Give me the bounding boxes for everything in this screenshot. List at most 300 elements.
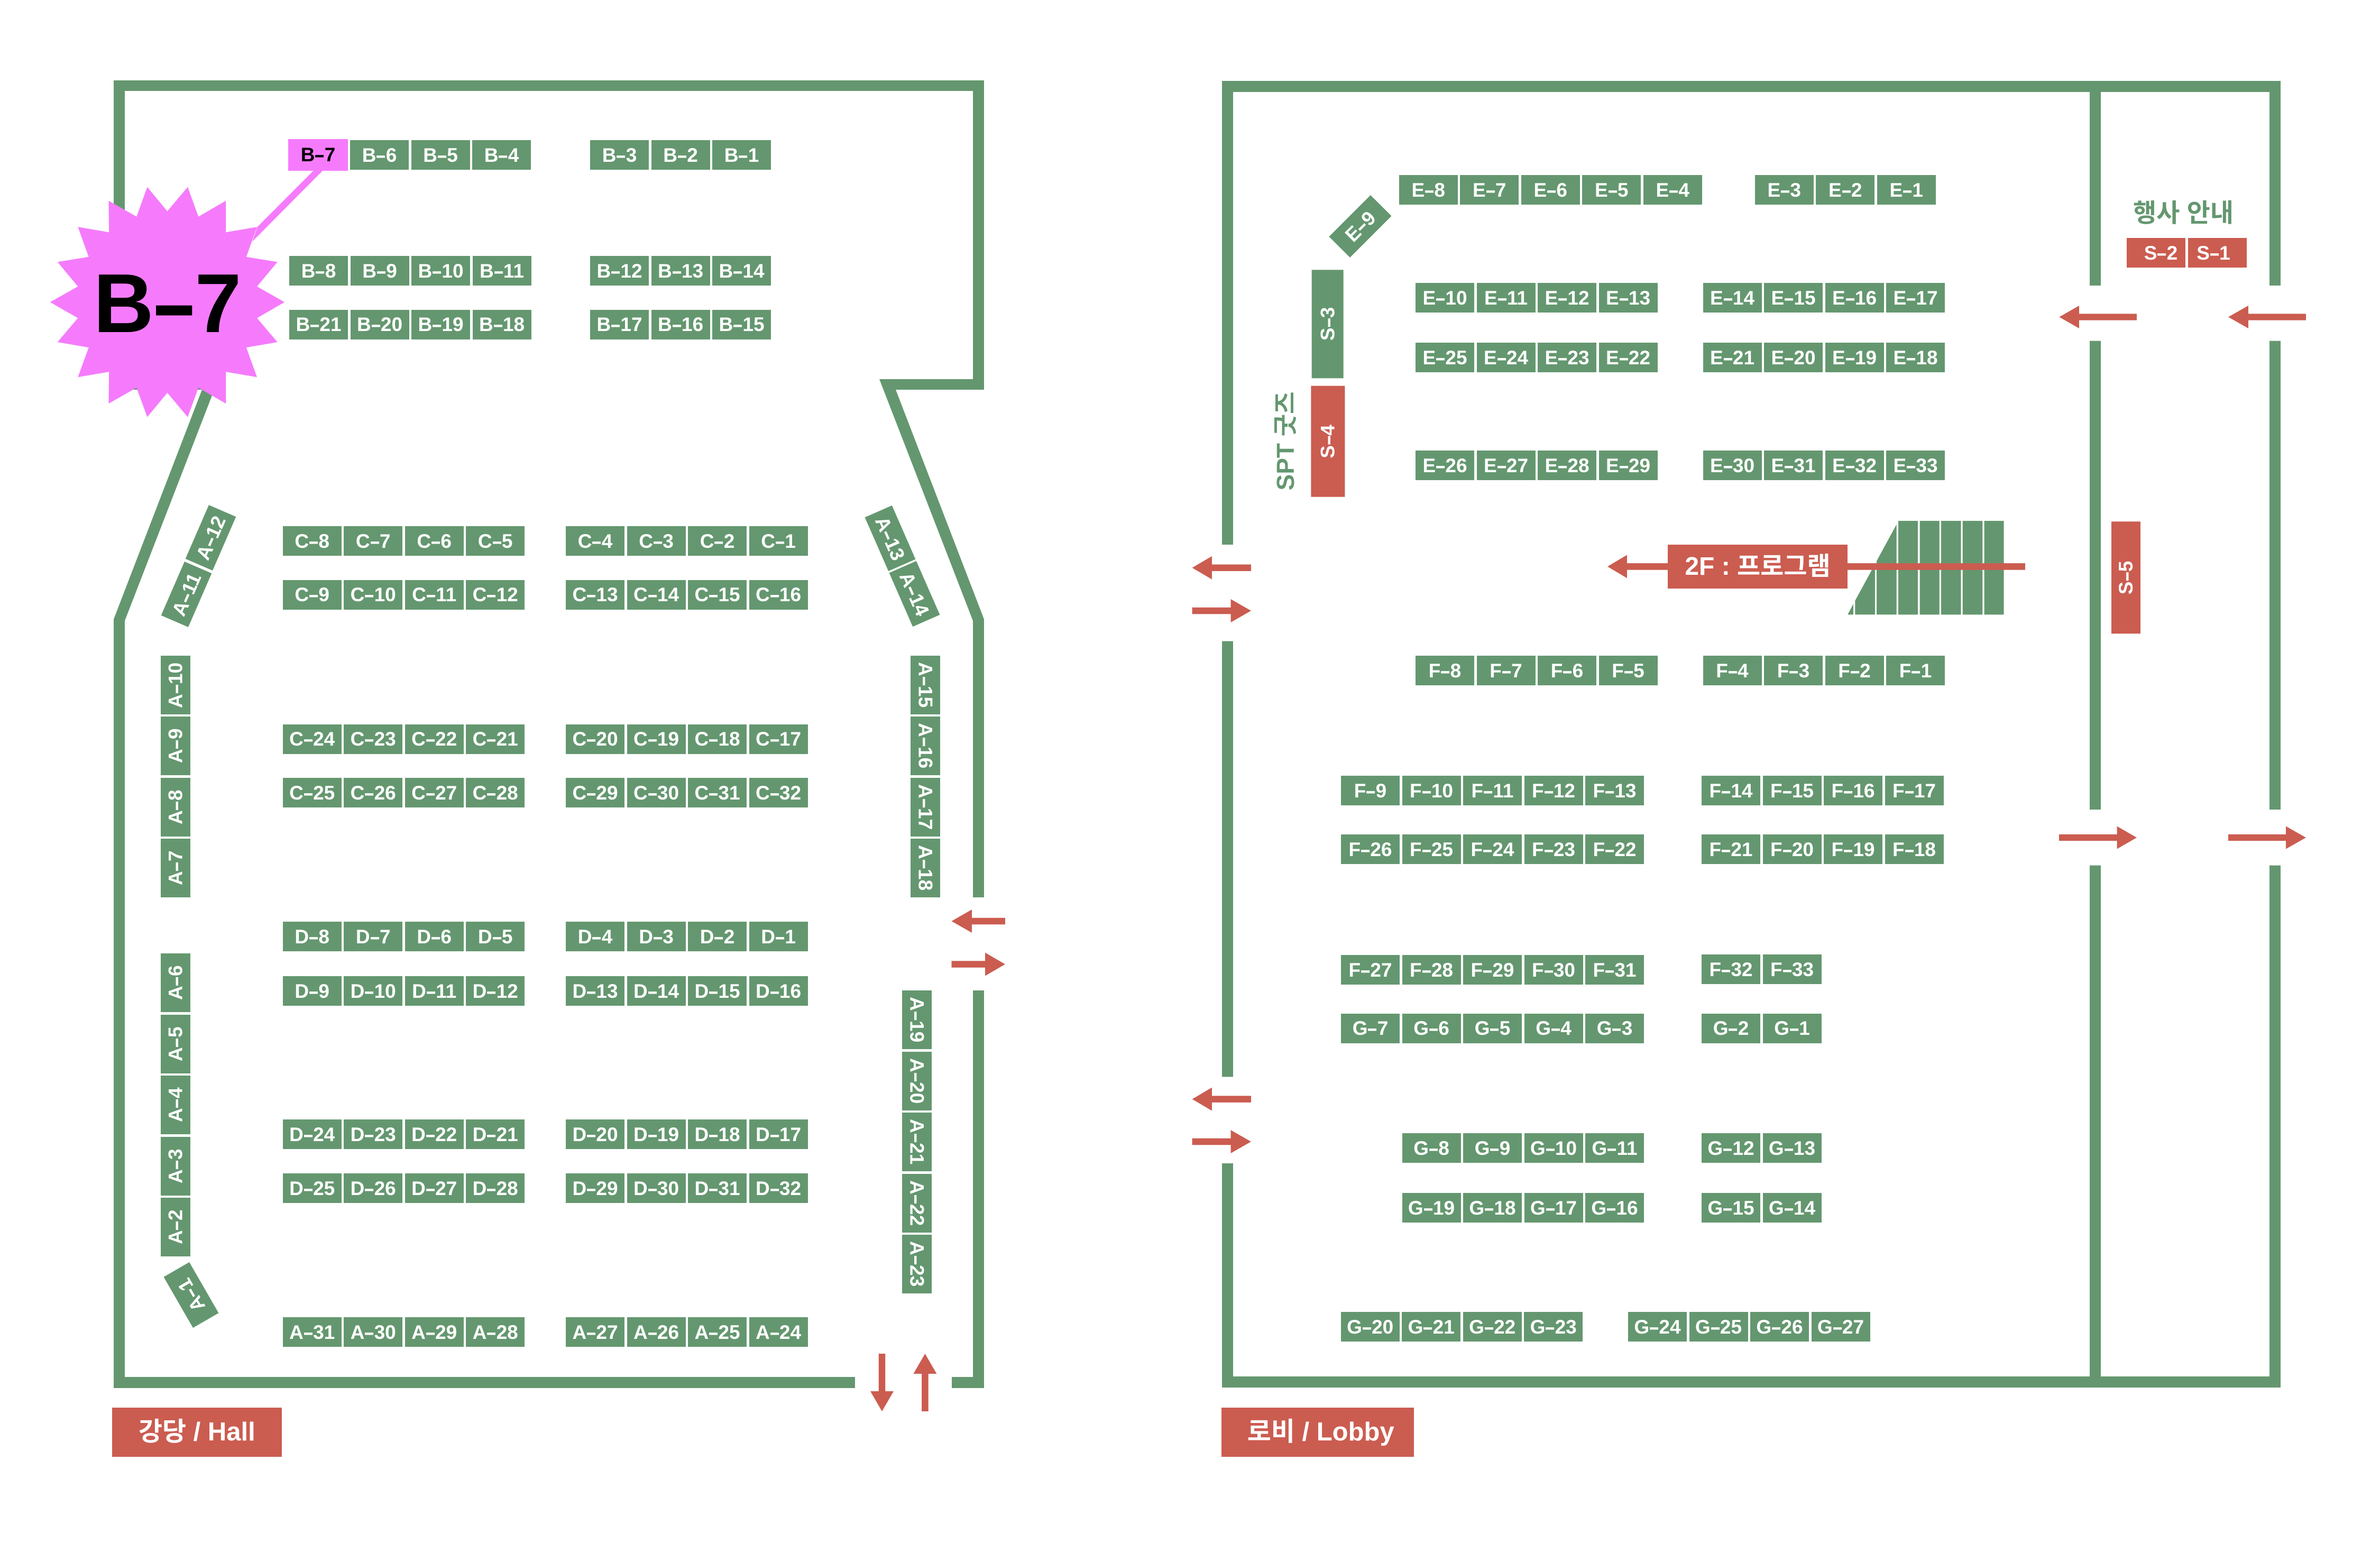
seats: G-19 to G-16 bbox=[1402, 1193, 1644, 1223]
seats: A-27 to A-24: - bbox=[586, 1321, 597, 1343]
seats: A-11 and A-12 angled: - bbox=[197, 532, 221, 550]
wall: hall outline bbox=[114, 80, 984, 1388]
arrow: corridor upper right bbox=[2228, 306, 2306, 328]
seats: E-10 to E-13: E 12 bbox=[1545, 287, 1589, 309]
seats: C-29 to C-32: - bbox=[769, 782, 780, 804]
seats: C-29 to C-32: C 29 bbox=[572, 782, 618, 804]
seats: B-8 to B-11: - bbox=[376, 260, 387, 281]
seats: F-14 to F-17 bbox=[1702, 776, 1944, 805]
seats: A-27 to A-24: A 26 bbox=[633, 1321, 679, 1343]
seats: C-4 to C-1 bbox=[566, 526, 808, 556]
seats: F-27 to F-31: F 30 bbox=[1532, 959, 1575, 980]
seats: C-29 to C-32 bbox=[566, 778, 808, 807]
seats: F-14 to F-17: F 15 bbox=[1770, 779, 1814, 802]
seats: F-27 to F-31: F 29 bbox=[1471, 959, 1514, 980]
seats: D-25 to D-28: - bbox=[486, 1177, 497, 1199]
seats: E-21 to E-18: E 21 bbox=[1710, 347, 1754, 368]
seats: B-3 to B-1: B 2 bbox=[663, 144, 698, 166]
seats: F-21 to F-18: F 20 bbox=[1770, 839, 1814, 860]
seats: D-29 to D-32: - bbox=[708, 1177, 719, 1199]
arrow: lobby west door in 1 bbox=[1192, 599, 1251, 622]
seats: A-11 and A-12 angled: A11 bbox=[167, 570, 205, 619]
seats: C-9 to C-12: - bbox=[426, 584, 436, 605]
seats: C-24 to C-21: C 22 bbox=[411, 728, 457, 750]
seats: E-10 to E-13 bbox=[1416, 283, 1657, 313]
seats: C-20 to C-17: - bbox=[647, 728, 658, 750]
seats: B-8 to B-11: B 9 bbox=[362, 260, 397, 281]
seats: A-19 to A-23 vertical: - bbox=[906, 1255, 927, 1266]
seats: C-8 to C-5: - bbox=[430, 530, 442, 552]
seats: C-25 to C-28: C 25 bbox=[289, 782, 335, 804]
seats: E-26 to E-29: E 29 bbox=[1606, 455, 1650, 476]
seats: D-4 to D-1: - bbox=[713, 925, 724, 948]
arrow: hall south door down bbox=[870, 1354, 894, 1411]
seats: E-8 to E-4: - bbox=[1546, 179, 1557, 201]
seats: B-17 to B-15: - bbox=[732, 314, 743, 335]
seats: C-9 to C-12: - bbox=[364, 584, 375, 605]
seats: F-27 to F-31: - bbox=[1482, 959, 1493, 980]
seats: C-9 to C-12: - bbox=[486, 584, 497, 605]
seats: F-4 to F-1: F 2 bbox=[1838, 660, 1871, 681]
seats: D-29 to D-32: D 30 bbox=[633, 1177, 679, 1199]
seats: G-15 and G-14: G 14 bbox=[1769, 1197, 1815, 1218]
seats: E-25 to E-22 bbox=[1416, 343, 1657, 372]
seats: D-8 to D-5: D 5 bbox=[478, 925, 512, 948]
seats: E-21 to E-18: E 19 bbox=[1832, 347, 1877, 368]
seats: F-4 to F-1: - bbox=[1910, 660, 1922, 681]
seats: F-8 to F-5: - bbox=[1501, 660, 1512, 681]
seats: F-26 to F-22: F 25 bbox=[1410, 839, 1453, 860]
seat: S-5: - bbox=[2115, 571, 2137, 582]
seats: G-2 and G-1: - bbox=[1789, 1017, 1800, 1039]
seats: F-8 to F-5: F 6 bbox=[1551, 660, 1583, 681]
seats: E-30 to E-33: - bbox=[1784, 455, 1795, 476]
seats: E-26 to E-29: E 27 bbox=[1484, 455, 1528, 476]
seats: G-7 to G-3: G 4 bbox=[1536, 1017, 1572, 1039]
arrow: hall east door out bbox=[952, 910, 1005, 933]
seats: D-29 to D-32: - bbox=[586, 1177, 597, 1199]
seats: C-20 to C-17: C 20 bbox=[572, 728, 618, 750]
seats: A-6 to A-2 vertical: - bbox=[164, 1220, 186, 1231]
seats: D-13 to D-16: - bbox=[586, 980, 597, 1002]
arrow: corridor upper left bbox=[2059, 306, 2137, 328]
seats: G-20 to G-23: - bbox=[1362, 1316, 1372, 1338]
seats: C-24 to C-21: C 21 bbox=[473, 728, 518, 750]
seats: E-10 to E-13: - bbox=[1618, 287, 1629, 309]
seats: G-7 to G-3: - bbox=[1550, 1017, 1561, 1039]
seats: D-8 to D-5: D 7 bbox=[356, 925, 390, 948]
seats: C-25 to C-28: - bbox=[364, 782, 375, 804]
seat: B-7 highlighted: B 7 bbox=[301, 144, 335, 166]
seats: B-12 to B-14 bbox=[590, 256, 771, 286]
seats: D-24 to D-21: D 23 bbox=[351, 1123, 396, 1145]
seats: G-7 to G-3 bbox=[1341, 1014, 1644, 1043]
seats: C-25 to C-28: C 27 bbox=[411, 782, 457, 804]
label: 2F program bbox=[1668, 545, 1848, 589]
seats: A-13 and A-14 angled bbox=[865, 506, 940, 627]
seats: D-9 to D-12: - bbox=[308, 980, 319, 1002]
seats: A-10 to A-7 vertical bbox=[161, 656, 190, 897]
seat: E-9 angled: E9 bbox=[1340, 207, 1380, 246]
seats: B-17 to B-15: - bbox=[671, 314, 682, 335]
seats: C-8 to C-5: - bbox=[369, 530, 380, 552]
seats: E-8 to E-4: E 8 bbox=[1411, 179, 1445, 201]
seats: C-9 to C-12: C 11 bbox=[412, 584, 456, 605]
seats: E-14 to E-17: - bbox=[1844, 287, 1855, 309]
seats: C-29 to C-32: C 30 bbox=[633, 782, 679, 804]
seats: G-15 and G-14 bbox=[1702, 1193, 1821, 1223]
seats: G-20 to G-23: - bbox=[1545, 1316, 1556, 1338]
seats: C-24 to C-21: C 23 bbox=[351, 728, 396, 750]
seats: E-3 to E-1 bbox=[1755, 175, 1936, 205]
seats: C-8 to C-5: C 6 bbox=[417, 530, 452, 552]
seats: E-14 to E-17: E 15 bbox=[1771, 287, 1816, 309]
seats: F-27 to F-31: - bbox=[1604, 959, 1615, 980]
seats: A-31 to A-28: A 31 bbox=[289, 1321, 335, 1343]
seats: F-26 to F-22: - bbox=[1360, 839, 1371, 860]
starburst bbox=[50, 187, 284, 417]
seats: B-3 to B-1: B 1 bbox=[724, 144, 759, 166]
seats: D-24 to D-21: - bbox=[302, 1123, 314, 1145]
seats: G-2 and G-1 bbox=[1702, 1014, 1821, 1043]
seats: A-10 to A-7 vertical: - bbox=[164, 800, 186, 811]
seats: G-20 to G-23 bbox=[1341, 1312, 1583, 1342]
seats: G-19 to G-16: G 19 bbox=[1408, 1197, 1455, 1218]
arrow: hall south door up bbox=[913, 1354, 936, 1411]
seats: E-8 to E-4: - bbox=[1607, 179, 1618, 201]
seats: F-14 to F-17: F 14 bbox=[1709, 779, 1752, 802]
wall: hall lower right bbox=[952, 990, 984, 1388]
seats: C-8 to C-5: - bbox=[491, 530, 502, 552]
seats: C-25 to C-28: - bbox=[425, 782, 436, 804]
seats: F-4 to F-1: F 3 bbox=[1777, 660, 1809, 681]
seats: C-25 to C-28: - bbox=[302, 782, 314, 804]
seats: A-27 to A-24: - bbox=[647, 1321, 658, 1343]
seats: E-14 to E-17: - bbox=[1722, 287, 1733, 309]
seats: D-9 to D-12: - bbox=[364, 980, 375, 1002]
callout connector bbox=[252, 170, 323, 242]
seats: C-9 to C-12: C 12 bbox=[473, 584, 518, 605]
seats: F-9 to F-13: F 9 bbox=[1354, 779, 1386, 802]
seats: G-8 to G-11: - bbox=[1489, 1137, 1500, 1159]
icon: staircase bbox=[1848, 521, 2004, 614]
seats: D-20 to D-17: - bbox=[647, 1123, 658, 1145]
seats: E-8 to E-4: - bbox=[1424, 179, 1435, 201]
seats: D-8 to D-5: D 8 bbox=[295, 925, 329, 948]
seats: G-20 to G-23: - bbox=[1484, 1316, 1494, 1338]
seats: G-24 to G-27: - bbox=[1649, 1316, 1660, 1338]
seats: S-2 and S-1: S 1 bbox=[2197, 242, 2230, 263]
seats: E-8 to E-4: - bbox=[1485, 179, 1496, 201]
seats: B-3 to B-1: - bbox=[677, 144, 688, 166]
seats: E-8 to E-4 bbox=[1399, 175, 1702, 205]
seats: F-9 to F-13: - bbox=[1543, 779, 1554, 802]
label: hall bbox=[112, 1408, 282, 1457]
seats: A-27 to A-24: - bbox=[769, 1321, 780, 1343]
seats: E-26 to E-29: E 26 bbox=[1422, 455, 1467, 476]
seats: E-10 to E-13: E 11 bbox=[1484, 287, 1528, 309]
seats: G-24 to G-27: - bbox=[1832, 1316, 1843, 1338]
seats: C-20 to C-17: - bbox=[586, 728, 597, 750]
seats: B-6 to B-4: - bbox=[375, 144, 387, 166]
seats: A-19 to A-23 vertical bbox=[902, 990, 932, 1293]
seat: A-1 angled: - bbox=[178, 1283, 203, 1303]
seats: G-19 to G-16: - bbox=[1484, 1197, 1495, 1218]
seats: A-6 to A-2 vertical: A3 bbox=[164, 1149, 186, 1183]
arrow: corridor lower left bbox=[2059, 826, 2137, 849]
seats: D-9 to D-12: - bbox=[426, 980, 436, 1002]
seats: D-29 to D-32: D 31 bbox=[694, 1177, 740, 1199]
seats: E-21 to E-18: - bbox=[1906, 347, 1917, 368]
seats: F-8 to F-5 bbox=[1416, 656, 1657, 685]
seats: B-8 to B-11: B 8 bbox=[301, 260, 336, 281]
seats: S-2 and S-1: - bbox=[2209, 242, 2220, 263]
seats: D-9 to D-12: D 9 bbox=[295, 980, 329, 1002]
seats: E-25 to E-22: - bbox=[1557, 347, 1568, 368]
seats: A-13 and A-14 angled: - bbox=[901, 581, 925, 600]
seats: D-8 to D-5: - bbox=[430, 925, 442, 948]
seats: E-21 to E-18: - bbox=[1722, 347, 1733, 368]
seats: A-6 to A-2 vertical: A4 bbox=[164, 1088, 186, 1122]
seats: E-14 to E-17: E 14 bbox=[1710, 287, 1754, 309]
seats: E-10 to E-13: E 13 bbox=[1606, 287, 1650, 309]
seats: C-24 to C-21: - bbox=[486, 728, 497, 750]
seats: D-13 to D-16: - bbox=[647, 980, 658, 1002]
arrow: hall east door in bbox=[952, 953, 1005, 976]
seats: S-2 and S-1 bbox=[2127, 238, 2246, 268]
seats: B-12 to B-14: - bbox=[671, 260, 682, 281]
seats: A-27 to A-24 bbox=[566, 1317, 808, 1347]
seats: A-6 to A-2 vertical bbox=[161, 953, 190, 1256]
seats: F-26 to F-22: F 24 bbox=[1471, 839, 1514, 860]
seats: E-10 to E-13: - bbox=[1496, 287, 1508, 309]
seats: E-30 to E-33: - bbox=[1906, 455, 1917, 476]
seats: A-6 to A-2 vertical: - bbox=[164, 1098, 186, 1109]
seats: D-13 to D-16: D 15 bbox=[694, 980, 740, 1002]
seats: B-6 to B-4: B 5 bbox=[423, 144, 458, 166]
seats: E-10 to E-13: - bbox=[1557, 287, 1568, 309]
seats: E-3 to E-1: E 2 bbox=[1828, 179, 1862, 201]
seats: D-9 to D-12: D 11 bbox=[412, 980, 456, 1002]
seats: B-8 to B-11: - bbox=[431, 260, 443, 281]
seats: D-29 to D-32 bbox=[566, 1173, 808, 1203]
seats: A-19 to A-23 vertical: - bbox=[906, 1193, 927, 1205]
seats: F-14 to F-17: F 16 bbox=[1832, 779, 1875, 802]
seats: E-25 to E-22: E 22 bbox=[1606, 347, 1650, 368]
seats: F-21 to F-18: - bbox=[1843, 839, 1854, 860]
seats: D-4 to D-1: D 3 bbox=[639, 925, 674, 948]
seats: C-20 to C-17: - bbox=[769, 728, 780, 750]
arrow: corridor lower right bbox=[2228, 826, 2306, 849]
seats: F-4 to F-1: F 1 bbox=[1899, 660, 1932, 681]
seats: A-19 to A-23 vertical: A 21 bbox=[906, 1119, 927, 1165]
seats: A-19 to A-23 vertical: - bbox=[906, 1011, 927, 1022]
label: 2F program: 2F : 프로그램 bbox=[1685, 552, 1831, 581]
seats: G-20 to G-23: - bbox=[1422, 1316, 1433, 1338]
seats: G-12 and G-13: G 13 bbox=[1769, 1137, 1815, 1159]
seats: S-2 and S-1: - bbox=[2156, 242, 2167, 263]
seats: D-13 to D-16: - bbox=[769, 980, 780, 1002]
seats: G-8 to G-11: - bbox=[1545, 1137, 1556, 1159]
seats: C-9 to C-12: C 10 bbox=[351, 584, 396, 605]
seats: F-8 to F-5: F 5 bbox=[1612, 660, 1644, 681]
seats: D-20 to D-17: - bbox=[586, 1123, 597, 1145]
seats: F-32 and F-33: F 33 bbox=[1770, 958, 1814, 980]
seats: E-26 to E-29: - bbox=[1618, 455, 1629, 476]
seats: F-8 to F-5: - bbox=[1623, 660, 1634, 681]
seats: B-12 to B-14: - bbox=[732, 260, 743, 281]
seats: G-19 to G-16: G 17 bbox=[1530, 1197, 1577, 1218]
seats: G-20 to G-23: G 23 bbox=[1530, 1316, 1577, 1338]
seats: A-31 to A-28: A 30 bbox=[351, 1321, 396, 1343]
seats: A-15 to A-18 vertical: A 16 bbox=[915, 723, 936, 769]
seats: D-8 to D-5 bbox=[283, 922, 525, 951]
seats: D-20 to D-17: - bbox=[769, 1123, 780, 1145]
seats: F-27 to F-31: - bbox=[1543, 959, 1554, 980]
seats: C-4 to C-1: C 2 bbox=[700, 530, 734, 552]
seats: E-8 to E-4: - bbox=[1668, 179, 1679, 201]
seats: G-19 to G-16: - bbox=[1606, 1197, 1617, 1218]
seats: D-13 to D-16 bbox=[566, 976, 808, 1006]
seats: F-9 to F-13: F 12 bbox=[1532, 779, 1575, 802]
seats: E-3 to E-1: - bbox=[1841, 179, 1852, 201]
seats: D-24 to D-21 bbox=[283, 1119, 525, 1149]
seats: B-12 to B-14: B 14 bbox=[719, 260, 765, 281]
seats: A-10 to A-7 vertical: - bbox=[164, 861, 186, 872]
seats: D-24 to D-21: D 21 bbox=[473, 1123, 518, 1145]
seats: C-25 to C-28: C 28 bbox=[473, 782, 518, 804]
seats: B-21 to B-18: B 20 bbox=[357, 314, 402, 335]
seats: A-6 to A-2 vertical: - bbox=[164, 976, 186, 987]
seats: A-10 to A-7 vertical: - bbox=[164, 739, 186, 750]
seats: A-31 to A-28: - bbox=[302, 1321, 314, 1343]
seats: F-4 to F-1: - bbox=[1850, 660, 1860, 681]
seats: E-26 to E-29: - bbox=[1557, 455, 1568, 476]
seats: D-25 to D-28 bbox=[283, 1173, 525, 1203]
seats: D-8 to D-5: - bbox=[491, 925, 502, 948]
seats: A-15 to A-18 vertical: - bbox=[915, 859, 936, 870]
seats: F-26 to F-22: F 26 bbox=[1348, 839, 1392, 860]
seats: C-29 to C-32: - bbox=[647, 782, 658, 804]
seats: B-21 to B-18 bbox=[289, 310, 531, 339]
seats: E-26 to E-29: - bbox=[1435, 455, 1446, 476]
seats: D-9 to D-12: D 12 bbox=[473, 980, 518, 1002]
seats: G-7 to G-3: G 3 bbox=[1597, 1017, 1632, 1039]
seats: S-2 and S-1: S 2 bbox=[2144, 242, 2177, 263]
seats: C-8 to C-5 bbox=[283, 526, 525, 556]
seats: A-27 to A-24: A 25 bbox=[694, 1321, 740, 1343]
seats: G-12 and G-13 bbox=[1702, 1133, 1821, 1163]
label: hall: 강당 / Hall bbox=[139, 1418, 255, 1446]
seats: D-4 to D-1: - bbox=[591, 925, 602, 948]
seats: A-31 to A-28: - bbox=[425, 1321, 436, 1343]
seats: G-8 to G-11: G 10 bbox=[1530, 1137, 1577, 1159]
seats: D-24 to D-21: - bbox=[364, 1123, 375, 1145]
seats: C-13 to C-16: C 15 bbox=[694, 584, 740, 605]
label: lobby: 로비 / Lobby bbox=[1247, 1418, 1394, 1446]
seats: D-24 to D-21: D 24 bbox=[289, 1123, 335, 1145]
seats: A-15 to A-18 vertical: - bbox=[915, 675, 936, 686]
seats: B-8 to B-11: B 10 bbox=[418, 260, 464, 281]
seats: F-21 to F-18: - bbox=[1781, 839, 1793, 860]
seats: F-14 to F-17: F 17 bbox=[1892, 779, 1936, 802]
seats: E-14 to E-17 bbox=[1703, 283, 1945, 313]
seats: E-8 to E-4: E 6 bbox=[1533, 179, 1567, 201]
seat: S-3: S3 bbox=[1317, 307, 1339, 341]
seats: B-8 to B-11: B 11 bbox=[480, 260, 524, 281]
seats: A-6 to A-2 vertical: A2 bbox=[164, 1210, 186, 1244]
seats: F-9 to F-13: - bbox=[1365, 779, 1376, 802]
seats: E-3 to E-1: - bbox=[1780, 179, 1791, 201]
seats: C-20 to C-17: C 19 bbox=[633, 728, 679, 750]
seats: C-13 to C-16: - bbox=[708, 584, 719, 605]
seats: C-8 to C-5: - bbox=[308, 530, 319, 552]
seats: F-26 to F-22: - bbox=[1482, 839, 1493, 860]
seats: A-31 to A-28: A 28 bbox=[473, 1321, 518, 1343]
seats: E-10 to E-13: E 10 bbox=[1422, 287, 1467, 309]
seats: B-6 to B-4: - bbox=[437, 144, 448, 166]
seats: F-14 to F-17: - bbox=[1781, 779, 1793, 802]
seats: F-9 to F-13: - bbox=[1421, 779, 1432, 802]
seats: F-14 to F-17: - bbox=[1721, 779, 1732, 802]
seats: B-17 to B-15: B 17 bbox=[596, 314, 642, 335]
seat: S-3 bbox=[1312, 270, 1344, 379]
seat: S-4: - bbox=[1317, 435, 1339, 446]
seats: E-26 to E-29 bbox=[1416, 451, 1657, 480]
seats: F-9 to F-13: F 10 bbox=[1410, 779, 1453, 802]
seats: A-6 to A-2 vertical: - bbox=[164, 1159, 186, 1170]
seats: B-12 to B-14: - bbox=[610, 260, 621, 281]
seats: D-25 to D-28: D 28 bbox=[473, 1177, 518, 1199]
seats: G-2 and G-1: G 2 bbox=[1713, 1017, 1749, 1039]
wall: lobby outer and inner walls bbox=[1222, 81, 2281, 1388]
seats: E-3 to E-1: - bbox=[1902, 179, 1913, 201]
seats: E-8 to E-4: E 7 bbox=[1473, 179, 1506, 201]
seats: E-21 to E-18 bbox=[1703, 343, 1945, 372]
seats: C-13 to C-16: C 13 bbox=[572, 584, 618, 605]
seats: F-8 to F-5: - bbox=[1562, 660, 1573, 681]
label: lobby bbox=[1221, 1408, 1414, 1457]
seats: B-3 to B-1: - bbox=[738, 144, 749, 166]
seats: A-13 and A-14 angled: A 13 bbox=[871, 513, 909, 563]
seats: E-14 to E-17: E 17 bbox=[1893, 287, 1938, 309]
seats: G-19 to G-16: G 18 bbox=[1469, 1197, 1516, 1218]
seats: A-19 to A-23 vertical: - bbox=[906, 1133, 927, 1144]
seats: E-14 to E-17: - bbox=[1906, 287, 1917, 309]
seats: A-10 to A-7 vertical: A9 bbox=[164, 729, 186, 763]
seats: E-30 to E-33: E 31 bbox=[1771, 455, 1816, 476]
seats: G-20 to G-23: G 22 bbox=[1469, 1316, 1515, 1338]
seats: F-26 to F-22 bbox=[1341, 834, 1644, 864]
seats: C-4 to C-1: C 1 bbox=[761, 530, 796, 552]
arrow: lobby west door out 2 bbox=[1192, 1088, 1251, 1111]
seats: F-8 to F-5: - bbox=[1440, 660, 1451, 681]
seats: B-17 to B-15 bbox=[590, 310, 771, 339]
seats: E-25 to E-22: E 24 bbox=[1484, 347, 1528, 368]
seats: B-8 to B-11 bbox=[289, 256, 531, 286]
seats: C-13 to C-16: - bbox=[586, 584, 597, 605]
seats: D-29 to D-32: D 29 bbox=[572, 1177, 618, 1199]
seats: B-3 to B-1: - bbox=[615, 144, 627, 166]
seats: F-32 and F-33: - bbox=[1721, 958, 1732, 980]
seats: C-24 to C-21: - bbox=[302, 728, 314, 750]
seats: E-25 to E-22: E 25 bbox=[1422, 347, 1467, 368]
seats: E-30 to E-33: E 30 bbox=[1710, 455, 1754, 476]
seats: F-21 to F-18: - bbox=[1721, 839, 1732, 860]
seats: D-8 to D-5: - bbox=[308, 925, 319, 948]
seats: F-9 to F-13 bbox=[1341, 776, 1644, 805]
seats: C-24 to C-21: - bbox=[364, 728, 375, 750]
